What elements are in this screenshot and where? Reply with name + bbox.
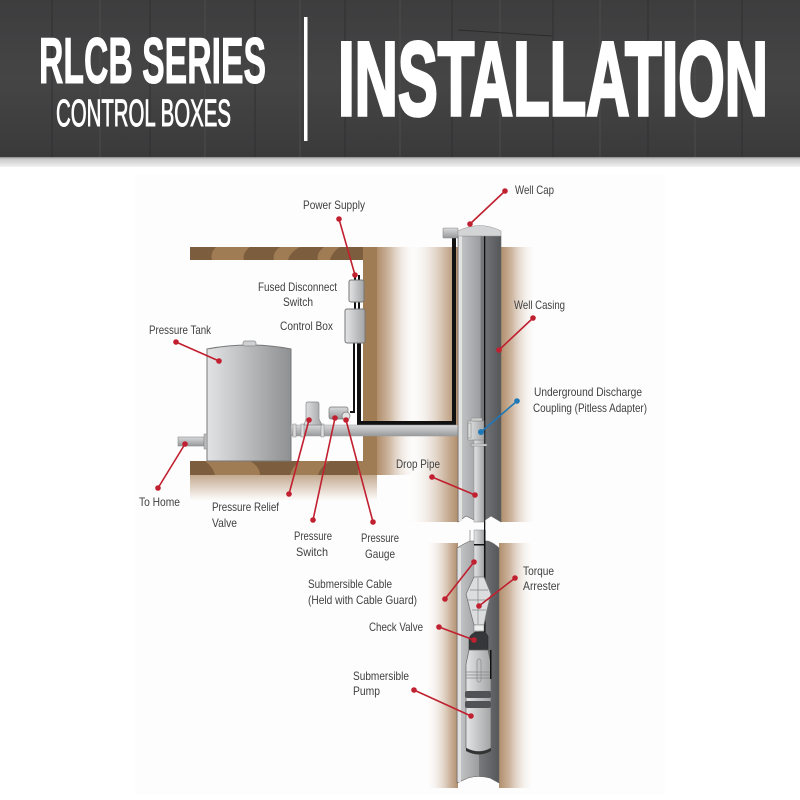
well diagram bbox=[139, 183, 647, 788]
labels: Power Supply bbox=[303, 198, 365, 212]
connecting wire between sections bbox=[484, 522, 485, 544]
heading: Control Boxes: CONTROL BOXES bbox=[56, 93, 231, 135]
header banner bbox=[0, 0, 800, 167]
labels: Arrester bbox=[523, 579, 560, 593]
labels: Switch bbox=[296, 545, 328, 559]
labels bbox=[139, 183, 647, 698]
labels: (Held with Cable Guard) bbox=[308, 593, 417, 607]
control box bbox=[345, 309, 365, 343]
labels: Fused Disconnect bbox=[258, 280, 338, 294]
divider bbox=[304, 17, 308, 141]
labels: Pressure bbox=[294, 529, 332, 543]
conduit: black power cable bbox=[350, 238, 454, 423]
heading: RLCB Series: RLCB SERIES bbox=[39, 24, 266, 97]
labels: Valve bbox=[212, 516, 237, 530]
labels: Pressure bbox=[361, 531, 399, 545]
labels: Control Box bbox=[280, 319, 333, 333]
labels: Submersible bbox=[353, 669, 409, 683]
labels: Underground Discharge bbox=[534, 385, 642, 399]
labels: Switch bbox=[283, 295, 313, 309]
labels: Torque bbox=[523, 564, 554, 578]
labels: Check Valve bbox=[369, 620, 423, 634]
pressure gauge bbox=[342, 412, 350, 420]
basement walls bbox=[190, 247, 377, 475]
torque arrester bbox=[466, 577, 491, 631]
labels: Drop Pipe bbox=[396, 457, 440, 471]
soil: ground behind basement and casing bbox=[190, 247, 537, 788]
submersible pump bbox=[465, 650, 492, 754]
pressure relief valve bbox=[304, 402, 322, 425]
well cap bbox=[443, 226, 501, 238]
labels: Coupling (Pitless Adapter) bbox=[533, 401, 647, 415]
upper well casing bbox=[458, 236, 501, 522]
lower well casing bbox=[457, 530, 499, 783]
check valve bbox=[469, 632, 488, 650]
pitless adapter and vertical drop pipe bbox=[468, 418, 487, 522]
labels: Pump bbox=[353, 684, 380, 698]
labels: Pressure Relief bbox=[212, 500, 280, 514]
horizontal drop pipe bbox=[291, 424, 471, 437]
pressure tank bbox=[207, 341, 291, 461]
labels: To Home bbox=[139, 495, 180, 509]
lower drop pipe bbox=[474, 530, 486, 652]
pressure switch bbox=[329, 407, 348, 419]
pipe to home bbox=[178, 434, 207, 449]
fused disconnect switch bbox=[349, 280, 364, 302]
labels: Pressure Tank bbox=[149, 323, 212, 337]
labels: Submersible Cable bbox=[308, 577, 392, 591]
labels: Gauge bbox=[365, 547, 395, 561]
labels: Well Cap bbox=[515, 183, 554, 197]
leader lines and dots bbox=[155, 188, 536, 719]
faint wood backdrop bbox=[135, 175, 665, 795]
labels: Well Casing bbox=[514, 298, 565, 312]
